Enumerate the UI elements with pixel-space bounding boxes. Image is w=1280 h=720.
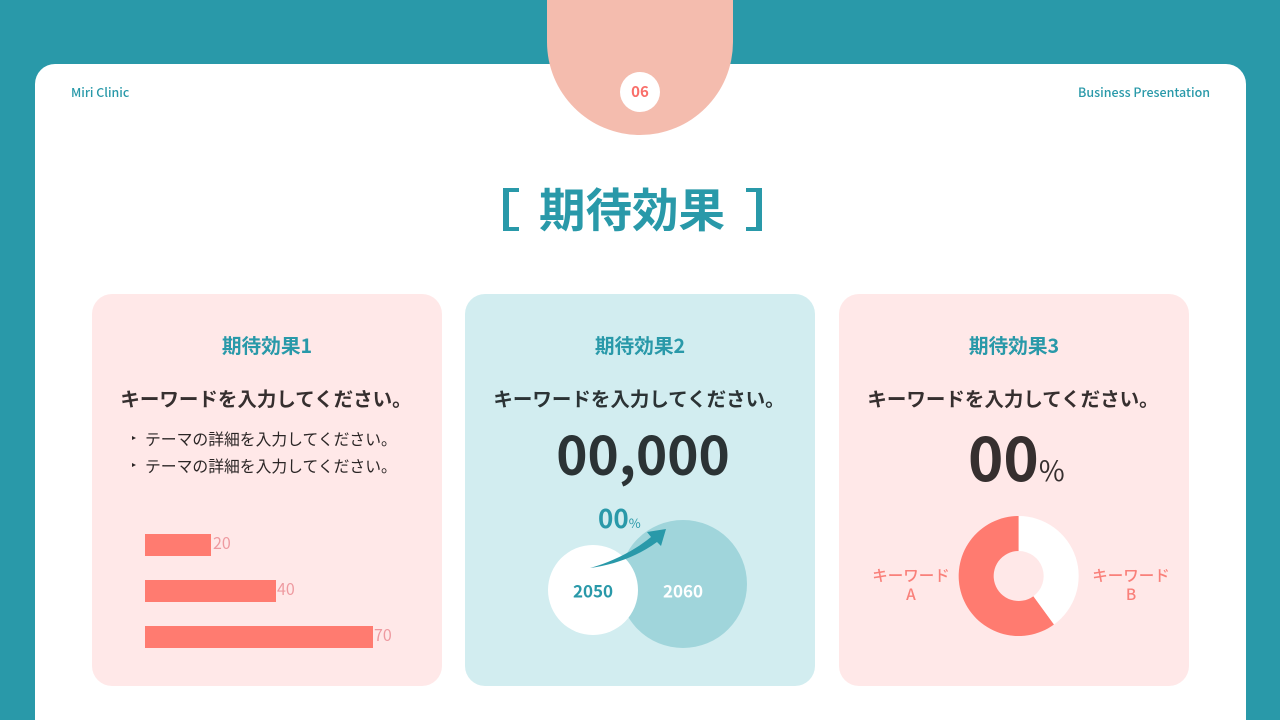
value 20: 20 bbox=[213, 530, 231, 554]
label 2060: 2060 bbox=[663, 578, 703, 602]
page number tab bbox=[547, 0, 733, 135]
donut label B: キーワード bbox=[1092, 564, 1170, 586]
growth diagram bbox=[548, 520, 747, 648]
label 2050: 2050 bbox=[573, 578, 613, 602]
arrow bbox=[590, 529, 666, 568]
value 70: 70 bbox=[374, 622, 392, 646]
title: 期待効果 bbox=[539, 174, 725, 241]
panel 2 keyword: キーワードを入力してください。 bbox=[493, 383, 785, 412]
bullet marker 1 bbox=[132, 436, 136, 440]
panel: expected effect 1 bbox=[92, 294, 442, 686]
panel: expected effect 2 bbox=[465, 294, 815, 686]
bullet 2: テーマの詳細を入力してください。 bbox=[145, 454, 397, 477]
bar chart bbox=[145, 530, 392, 648]
bullet 1: テーマの詳細を入力してください。 bbox=[145, 427, 397, 450]
panel 2 big number: 00,000 bbox=[556, 415, 730, 491]
presentation label: Business Presentation bbox=[1078, 82, 1210, 101]
donut label A bbox=[872, 564, 950, 605]
panel 3 heading: 期待効果3 bbox=[969, 330, 1059, 359]
value 40: 40 bbox=[277, 576, 295, 600]
circle 2050 bbox=[548, 545, 638, 635]
segment A bbox=[959, 516, 1054, 636]
bar 40 bbox=[145, 580, 276, 602]
panel 2 heading: 期待効果2 bbox=[595, 330, 685, 359]
donut label B bbox=[1092, 564, 1170, 605]
page number badge: 06 bbox=[631, 81, 649, 102]
donut label A: キーワード bbox=[872, 564, 950, 586]
brand label: Miri Clinic bbox=[71, 83, 129, 101]
segment B bbox=[1019, 516, 1079, 624]
panel: expected effect 3 bbox=[839, 294, 1189, 686]
growth percentage: 00% bbox=[598, 499, 641, 536]
donut label A: A bbox=[906, 583, 916, 605]
panel 1 bullet list bbox=[132, 427, 397, 477]
title left bracket bbox=[503, 188, 519, 231]
panel 1 heading: 期待効果1 bbox=[222, 330, 312, 359]
bullet marker 2 bbox=[132, 463, 136, 467]
panel 3 keyword: キーワードを入力してください。 bbox=[867, 383, 1159, 412]
circle 2060 bbox=[619, 520, 747, 648]
panel 3 big number: 00% bbox=[968, 412, 1065, 499]
donut chart bbox=[958, 516, 1078, 636]
page number badge bbox=[620, 72, 660, 112]
bar 20 bbox=[145, 534, 211, 556]
panel 1 keyword: キーワードを入力してください。 bbox=[120, 383, 412, 412]
bar 70 bbox=[145, 626, 373, 648]
donut label B: B bbox=[1126, 583, 1136, 605]
title right bracket bbox=[746, 188, 762, 231]
